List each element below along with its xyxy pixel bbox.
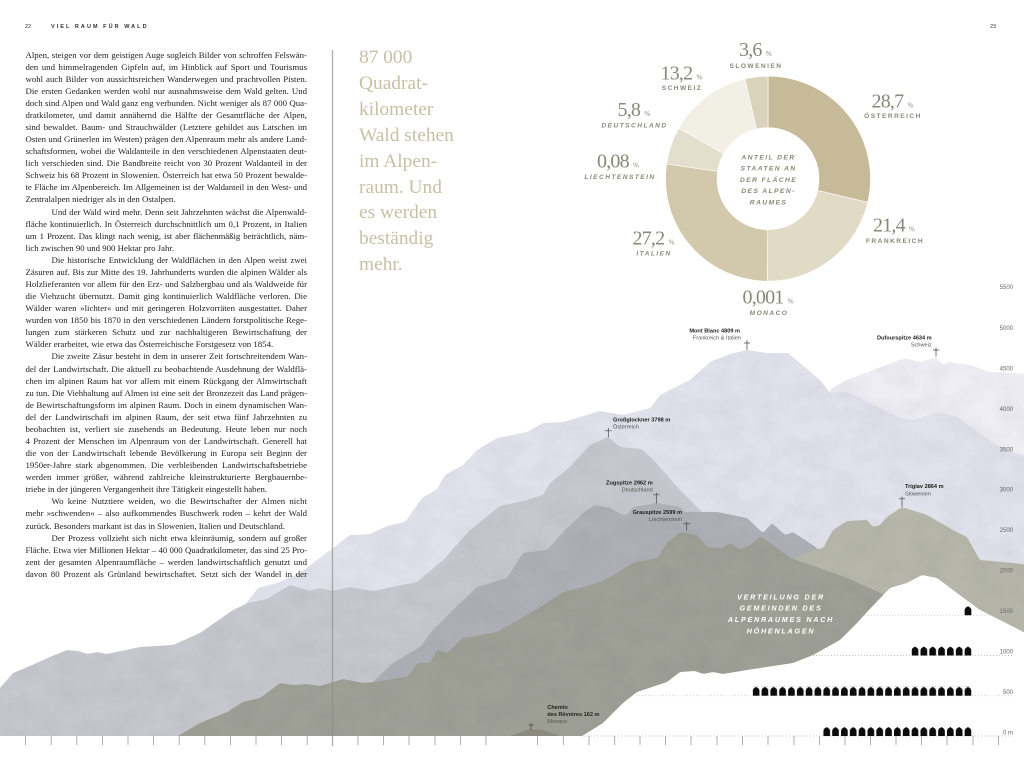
altitude axis labels: 1500 — [1000, 609, 1014, 615]
summit: Chemin des Révoires: Chemin — [547, 705, 568, 711]
altitude axis labels — [1000, 285, 1014, 736]
body text column: Die zweite Zäsur besteht in dem in unserer Zeit fortschreitendem Wan- — [52, 351, 307, 361]
heading: settlement distribution: GEMEINDEN DES — [739, 604, 823, 613]
slice: Frankreich — [767, 190, 868, 281]
mountain layer: Großglockner range — [0, 437, 720, 745]
body text column: del der Landwirtschaft. Die aktuell zu beobachtende Ausdehnung der Waldflä- — [26, 364, 307, 374]
summit: Chemin des Révoires: Monaco — [547, 719, 567, 725]
donut centre label: DER FLÄCHE — [740, 176, 797, 184]
pull quote: Wald stehen — [359, 125, 454, 146]
data label: Schweiz: SCHWEIZ — [662, 85, 702, 92]
body text column: Die ersten Gedanken werden wohl nur ausnahmsweise dem Wald gelten. Und — [26, 86, 307, 96]
white foreground peak for settlement distribution — [570, 575, 1024, 762]
body text column: den und himmelragenden Gipfeln auf, im Hinblick auf Sport und Tourismus — [26, 62, 307, 72]
summit: Mont Blanc: Mont Blanc 4809 m — [689, 329, 740, 335]
summit: Dufourspitze — [877, 335, 939, 356]
summit: Triglav — [899, 484, 944, 507]
body text column: de Bewirtschaftungsform im alpinen Raum. Doch in einem dynamischen Wan- — [26, 400, 307, 410]
altitude axis labels: 5000 — [1000, 326, 1014, 332]
slice: Slowenien — [745, 76, 768, 129]
altitude axis labels: 500 — [1003, 690, 1014, 696]
altitude axis labels: 3000 — [1000, 488, 1014, 494]
body text column: Schweiz bis 68 Prozent in Slowenien. Österreich hat etwa 50 Prozent bewalde- — [26, 170, 307, 180]
body text column: Die historische Entwicklung der Waldflächen in den Alpen weist zwei — [52, 255, 307, 265]
altitude axis labels: 2000 — [1000, 568, 1014, 574]
pull quote: mehr. — [359, 254, 403, 275]
body text column: wurden von 1850 bis 1870 in den verschiedenen Ländern forstpolitische Rege- — [26, 315, 307, 325]
heading: settlement distribution: ALPENRAUMES NACH — [727, 615, 834, 624]
body text column: schaftsformen, wobei die Waldanteile in den verschiedenen Alpenstaaten deut- — [26, 146, 307, 156]
data label: Frankreich — [866, 215, 924, 245]
summit: Dufourspitze: Schweiz — [911, 342, 932, 348]
data label: Liechtenstein: 0,08 % — [597, 150, 639, 172]
mountain layer: Zugspitze summit — [625, 503, 692, 518]
donut chart: share of the states in the Alpine area — [666, 76, 870, 281]
summit: Großglockner: Großglockner 3798 m — [613, 417, 670, 423]
pull quote: 87 000 — [359, 47, 412, 68]
body text column: Wälder waren »lichter« und mit geringeren Holzvorräten ausgestattet. Daher — [26, 303, 307, 313]
body text column: lich zwischen 90 und 900 Hektar pro Jahr. — [26, 243, 174, 253]
body text column: mehr »schwenden« – also aufkommendes Buschwerk roden – kehrt der Wald — [26, 508, 307, 518]
data label: Monaco: 0,001 % — [742, 286, 794, 308]
pull quote: es werden — [359, 202, 437, 223]
running header: left page: 22 — [25, 24, 31, 30]
body text column: Zentralalpen niedriger als in den Ostalpen. — [26, 194, 175, 204]
summit: Chemin des Révoires — [528, 705, 600, 730]
running header: right page number: 23 — [990, 24, 996, 30]
data label: Deutschland — [601, 99, 668, 130]
summit: Triglav: Triglav 2864 m — [905, 484, 944, 490]
body text column: lich verschieden sind. Die Bandbreite reicht von 30 Prozent Waldanteil in der — [26, 158, 307, 168]
settlement row: 1000 m — [912, 646, 971, 656]
summit: Grauspitze: Grauspitze 2599 m — [633, 510, 682, 516]
body text column — [26, 50, 307, 579]
mountain layer: Chemin des Révoires hill — [498, 729, 572, 742]
mountain layer: Mont Blanc range — [244, 350, 1024, 640]
summit: Mont Blanc: Frankreich & Italien — [693, 336, 741, 342]
baseline ticks — [26, 736, 999, 745]
summit: Grauspitze — [633, 510, 690, 530]
data label: Österreich: ÖSTERREICH — [864, 111, 922, 120]
altitude axis labels: 2500 — [1000, 528, 1014, 534]
pull quote: raum. Und — [359, 177, 442, 198]
data label: Deutschland: DEUTSCHLAND — [601, 123, 668, 130]
pull quote: Quadrat- — [359, 73, 428, 94]
body text column: Alpen, steigen vor dem geistigen Auge sogleich Bilder von schroffen Felswän- — [26, 50, 307, 60]
data label: Liechtenstein: LIECHTENSTEIN — [584, 174, 656, 181]
body text column: zurück. Besonders markant ist das in Slowenien, Italien und Deutschland. — [26, 521, 285, 531]
donut centre label — [740, 154, 797, 206]
summit: Triglav: Slowenien — [905, 491, 931, 497]
settlement row: 1500 m — [965, 606, 971, 615]
altitude axis labels: 3500 — [1000, 448, 1014, 454]
data label: Schweiz: 13,2 % — [660, 62, 703, 84]
summit: Zugspitze — [606, 481, 660, 504]
altitude axis labels: 5500 — [1000, 285, 1014, 291]
mountain layer: Zugspitze range — [365, 505, 830, 745]
summit: Großglockner: Österreich — [613, 423, 639, 430]
body text column: doch sind Alpen und Wald ganz eng verbunden. Nicht weniger als 87 000 Qua- — [26, 98, 307, 108]
body text column: sind bewaldet. Baum- und Strauchwälder (Letztere gebildet aus Latschen im — [26, 122, 307, 132]
slice: Österreich — [768, 76, 870, 202]
centre page gutter line — [332, 50, 334, 746]
data label: Italien: ITALIEN — [636, 251, 672, 258]
mountain silhouette chart — [0, 350, 1024, 762]
body text column: werden immer größer, während zahlreiche kleinstrukturierte Bergbauernbe- — [26, 472, 307, 482]
heading: settlement distribution — [727, 592, 834, 635]
data label: Liechtenstein — [584, 150, 656, 181]
body text column: chen im alpinen Raum hat vor allem mit einem Rückgang der Almwirtschaft — [26, 376, 307, 386]
summit: Zugspitze: Zugspitze 2962 m — [606, 481, 653, 487]
altitude guide lines — [582, 615, 1012, 736]
altitude axis labels: 4000 — [1000, 407, 1014, 413]
slice: Italien — [666, 164, 768, 281]
altitude axis labels: 4500 — [1000, 366, 1014, 372]
body text column: Der Prozess vollzieht sich nicht etwa kleinräumig, sondern auf großer — [52, 533, 307, 543]
body text column: die von der Landwirtschaft lebende Bevölkerung in Europa seit Beginn der — [26, 448, 307, 458]
donut centre label: DES ALPEN- — [741, 188, 796, 195]
data label: Deutschland: 5,8 % — [618, 99, 650, 121]
donut centre label: STAATEN AN — [740, 166, 797, 173]
summit: Chemin des Révoires: des Révoires 162 m — [547, 712, 600, 718]
summit: Großglockner — [605, 417, 670, 438]
body text column: davon 80 Prozent als Grünland bewirtschaftet. Setzt sich der Wandel in der — [26, 569, 307, 579]
body text column: die Viehzucht übernutzt. Damit ging kontinuierlich Waldfläche verloren. Die — [26, 291, 307, 301]
altitude axis labels: 0 m — [1003, 730, 1013, 736]
body text column: Wälder erarbeitet, wie etwa das Österreichische Forstgesetz von 1854. — [26, 339, 273, 349]
body text column: wohl auch Bilder von aussichtsreichen Wanderwegen und prachtvollen Pisten. — [26, 74, 307, 84]
data label: Italien: 27,2 % — [632, 227, 675, 249]
mountain layer: Dufourspitze range — [826, 357, 1024, 620]
body text column: te Fläche im Alpenbereich. Im Allgemeinen ist der Waldanteil in den West- und — [26, 182, 307, 192]
pull quote — [359, 47, 454, 275]
body text column: del der Landwirtschaft im alpinen Raum, der seit etwa fünf Jahrzehnten zu — [26, 412, 307, 422]
heading: settlement distribution: VERTEILUNG DER — [737, 592, 825, 601]
white strip below baseline — [0, 736, 1024, 762]
data label: Slowenien — [730, 39, 782, 70]
settlement row: 0 m — [823, 727, 971, 736]
body text column: Und der Wald wird mehr. Denn seit Jahrzehnten wächst die Alpenwald- — [52, 207, 307, 217]
body text column: Fläche. Etwa vier Millionen Hektar – 40 000 Quadratkilometer, das sind 25 Pro- — [26, 545, 307, 555]
running header: left page — [25, 23, 149, 30]
summit: Dufourspitze: Dufourspitze 4634 m — [877, 335, 932, 341]
slice: Deutschland — [667, 128, 724, 171]
pull quote: kilometer — [359, 99, 433, 120]
body text column: um 1 Prozent. Das klingt nach wenig, ist aber flächenmäßig beträchtlich, näm- — [26, 231, 307, 241]
altitude axis labels: 1000 — [1000, 650, 1014, 656]
data label: Slowenien: SLOWENIEN — [730, 63, 782, 70]
body text column: Wo keine Nutztiere weiden, wo die Bewirtschafter der Almen nicht — [52, 496, 307, 506]
data label: Österreich — [864, 90, 922, 120]
body text column: Osten und Grünerlen im Westen) prägen den Alpenraum mehr als andere Land- — [26, 134, 307, 144]
body text column: 4 Prozent der Menschen im Alpenraum von der Landwirtschaft. Generell hat — [26, 436, 307, 446]
body text column: Zäsuren auf. Bis zur Mitte des 19. Jahrhunderts wurden die alpinen Wälder als — [26, 267, 307, 277]
body text column: lungen zum stärkeren Schutz und zur nachhaltigeren Bewirtschaftung der — [26, 327, 307, 337]
mountain layer: foreground range — [164, 532, 890, 745]
data label: Monaco: MONACO — [750, 310, 788, 317]
settlement row: 500 m — [753, 687, 971, 696]
body text column: dratkilometer, und damit annähernd die Hälfte der Gesamtfläche der Alpen, — [26, 110, 307, 120]
body text column: zu tun. Die Viehhaltung auf Almen ist eine seit der Bronzezeit das Land prägen- — [26, 388, 307, 398]
summit: Zugspitze: Deutschland — [622, 488, 653, 494]
summit: Mont Blanc — [689, 329, 750, 350]
slice: Schweiz — [679, 79, 757, 154]
donut centre label: RAUMES — [750, 200, 787, 206]
body text column: Holzlieferanten vor allem für den Erz- und Salzbergbau und als Waldweide für — [26, 279, 307, 289]
running header: left page: VIEL RAUM FÜR WALD — [51, 23, 149, 30]
body text column: 1950er-Jahre stark abgenommen. Die verbleibenden Landwirtschaftsbetriebe — [26, 460, 307, 470]
mountain layer: Triglav range — [785, 507, 1024, 660]
body text column: triebe in der jüngeren Vergangenheit ihre Tätigkeit eingestellt haben. — [26, 484, 267, 494]
summit: Grauspitze: Liechtenstein — [649, 517, 682, 523]
pull quote: beständig — [359, 228, 433, 249]
data label: Österreich: 28,7 % — [872, 90, 914, 112]
data label: Frankreich: FRANKREICH — [866, 238, 924, 245]
pull quote: im Alpen- — [359, 151, 437, 172]
data label: Slowenien: 3,6 % — [739, 39, 772, 61]
heading: settlement distribution: HÖHENLAGEN — [747, 626, 815, 635]
body text column: fläche kontinuierlich. In Österreich durchschnittlich um 0,1 Prozent, in Italien — [26, 219, 307, 229]
data label: Frankreich: 21,4 % — [873, 215, 915, 237]
donut centre label: ANTEIL DER — [740, 154, 796, 162]
body text column: beobachten ist, verliert sie zusehends an Bedeutung. Heute leben nur noch — [26, 424, 307, 434]
body text column: zent der gesamten Alpenraumfläche – werden landwirtschaftlich genutzt und — [26, 557, 307, 567]
